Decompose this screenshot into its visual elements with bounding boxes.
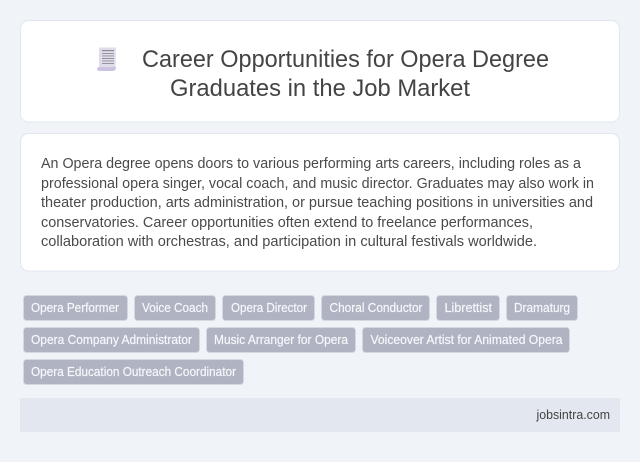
tag: Choral Conductor	[322, 296, 430, 320]
title: Career Opportunities for Opera Degree	[142, 46, 549, 73]
tag: Opera Education Outreach Coordinator	[24, 360, 244, 384]
tag: Opera Performer: Opera Performer	[31, 301, 119, 315]
tag: Opera Company Administrator: Opera Company Administrator	[31, 333, 192, 347]
description text: theater production, arts administration, or pursue teaching positions in universities and	[41, 195, 593, 211]
description text: collaboration with orchestras, and participation in cultural festivals worldwide.	[41, 234, 537, 250]
tag: Dramaturg	[506, 296, 578, 320]
tag: Opera Director	[222, 296, 314, 320]
tag: Voice Coach: Voice Coach	[142, 301, 208, 315]
title: Graduates in the Job Market	[170, 75, 470, 102]
tag: Opera Director: Opera Director	[231, 301, 307, 315]
tag: Music Arranger for Opera: Music Arranger for Opera	[214, 333, 348, 347]
icon: document scroll	[97, 48, 116, 71]
title	[142, 46, 549, 102]
description text: professional opera singer, vocal coach, and music director. Graduates may also work in	[41, 176, 594, 192]
description text: conservatories. Career opportunities often extend to freelance performances,	[41, 215, 533, 231]
tag: Music Arranger for Opera	[206, 328, 356, 352]
panel: header	[20, 20, 620, 122]
footer bar	[20, 398, 620, 432]
tag: Dramaturg: Dramaturg	[514, 301, 570, 315]
tag: Opera Performer	[24, 296, 128, 320]
tag: Voiceover Artist for Animated Opera: Voiceover Artist for Animated Opera	[370, 333, 563, 347]
tag: Choral Conductor: Choral Conductor	[330, 301, 422, 315]
description text: An Opera degree opens doors to various performing arts careers, including roles as a	[41, 156, 582, 172]
tag list: job roles	[24, 296, 578, 384]
panel: description	[20, 134, 620, 271]
description text	[41, 156, 594, 250]
tag: Opera Company Administrator	[24, 328, 200, 352]
tag: Librettist: Librettist	[444, 301, 493, 315]
footer source text: jobsintra.com	[536, 408, 610, 422]
tag: Voiceover Artist for Animated Opera	[362, 328, 570, 352]
tag: Opera Education Outreach Coordinator: Opera Education Outreach Coordinator	[31, 365, 236, 379]
tag: Voice Coach	[134, 296, 216, 320]
tag: Librettist	[436, 296, 500, 320]
